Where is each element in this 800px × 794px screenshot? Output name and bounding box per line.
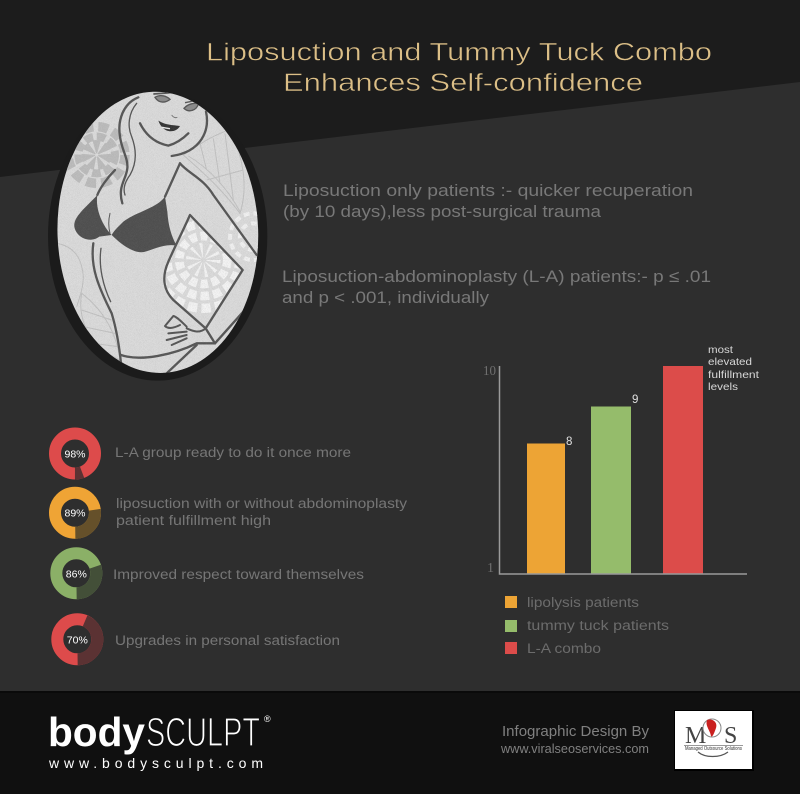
design credit: [500, 723, 649, 756]
note: most elevated fulfillment levels: levels: [708, 381, 738, 393]
credit logo: MOS: S: [724, 723, 737, 749]
title: Enhances Self-confidence: [283, 69, 643, 97]
legend: [505, 595, 669, 656]
hip cutout flower: [166, 217, 240, 313]
legend: lipolysis patients: [527, 595, 639, 610]
label: 89%: [116, 496, 407, 528]
donut: 98%: [55, 434, 95, 474]
note: most elevated fulfillment levels: fulfillment: [708, 369, 759, 381]
credit logo: MOS: [674, 710, 754, 771]
value: 8: 8: [566, 436, 572, 448]
design credit: www.viralseoservices.com: [500, 741, 649, 756]
text block: liposuction only: [283, 181, 693, 221]
donut: 86%: [56, 553, 96, 593]
brand logo: bodySCULPT: [48, 709, 271, 771]
title: Liposuction and Tummy Tuck Combo: [206, 38, 712, 66]
donut: 89%: [55, 493, 95, 533]
label: 89%: patient fulfillment high: [116, 513, 271, 528]
brand logo: bodySCULPT: SCULPT: [146, 709, 260, 755]
donut: 70%: 70%: [67, 634, 88, 646]
value: 9: 9: [632, 394, 638, 406]
text block: liposuction only: Liposuction only patients :- quicker recuperation: [283, 181, 693, 200]
background flower: [68, 127, 125, 183]
label: 89%: liposuction with or without abdominoplasty: [116, 496, 407, 511]
text block: liposuction only: (by 10 days),less post-surgical trauma: [283, 202, 602, 221]
title: [206, 38, 712, 97]
background leaves: [57, 130, 244, 360]
legend: tummy tuck patients: [527, 618, 669, 633]
donut: 70%: [57, 619, 97, 659]
paper grain: [58, 92, 258, 372]
note: most elevated fulfillment levels: [708, 344, 759, 393]
axes: [500, 366, 747, 574]
credit logo: MOS: Managed Outsource Solutions: [685, 746, 742, 752]
hand: [165, 316, 206, 345]
text block: liposuction-abdominoplasty: [282, 267, 711, 307]
bar: L-A combo: [663, 366, 703, 574]
design credit: Infographic Design By: [502, 723, 649, 740]
label: 70%: Upgrades in personal satisfaction: [115, 633, 340, 648]
face: [153, 93, 198, 131]
text block: liposuction-abdominoplasty: Liposuction-abdominoplasty (L-A) patients:- p ≤ .01: [282, 267, 711, 286]
white flower at the right: [228, 212, 258, 262]
donut: 86%: 86%: [66, 568, 87, 580]
bar: tummy tuck patients: [591, 406, 631, 574]
legend: L-A combo: [527, 641, 601, 656]
note: most elevated fulfillment levels: most: [708, 344, 733, 356]
brand logo: bodySCULPT: ®: [264, 714, 271, 724]
axis label: 10: 10: [483, 364, 496, 379]
donut: 98%: 98%: [64, 448, 86, 460]
body outlines: [93, 97, 257, 373]
label: 86%: Improved respect toward themselves: [113, 567, 364, 582]
brand logo: bodySCULPT: www.bodysculpt.com: [48, 755, 263, 771]
bar chart: [483, 344, 759, 576]
bra: [74, 195, 177, 252]
text block: liposuction-abdominoplasty: and p < .001, individually: [282, 288, 490, 307]
note: most elevated fulfillment levels: elevated: [708, 356, 752, 368]
footer band: [0, 691, 800, 794]
label: 98%: L-A group ready to do it once more: [115, 445, 351, 460]
brand logo: bodySCULPT: body: [48, 709, 145, 755]
axis label: 1: 1: [487, 561, 494, 576]
bar: lipolysis patients: [527, 444, 565, 574]
illustration: woman in oval frame: [48, 92, 268, 380]
donut: 89%: 89%: [64, 508, 86, 520]
credit logo: MOS: M: [685, 723, 706, 749]
